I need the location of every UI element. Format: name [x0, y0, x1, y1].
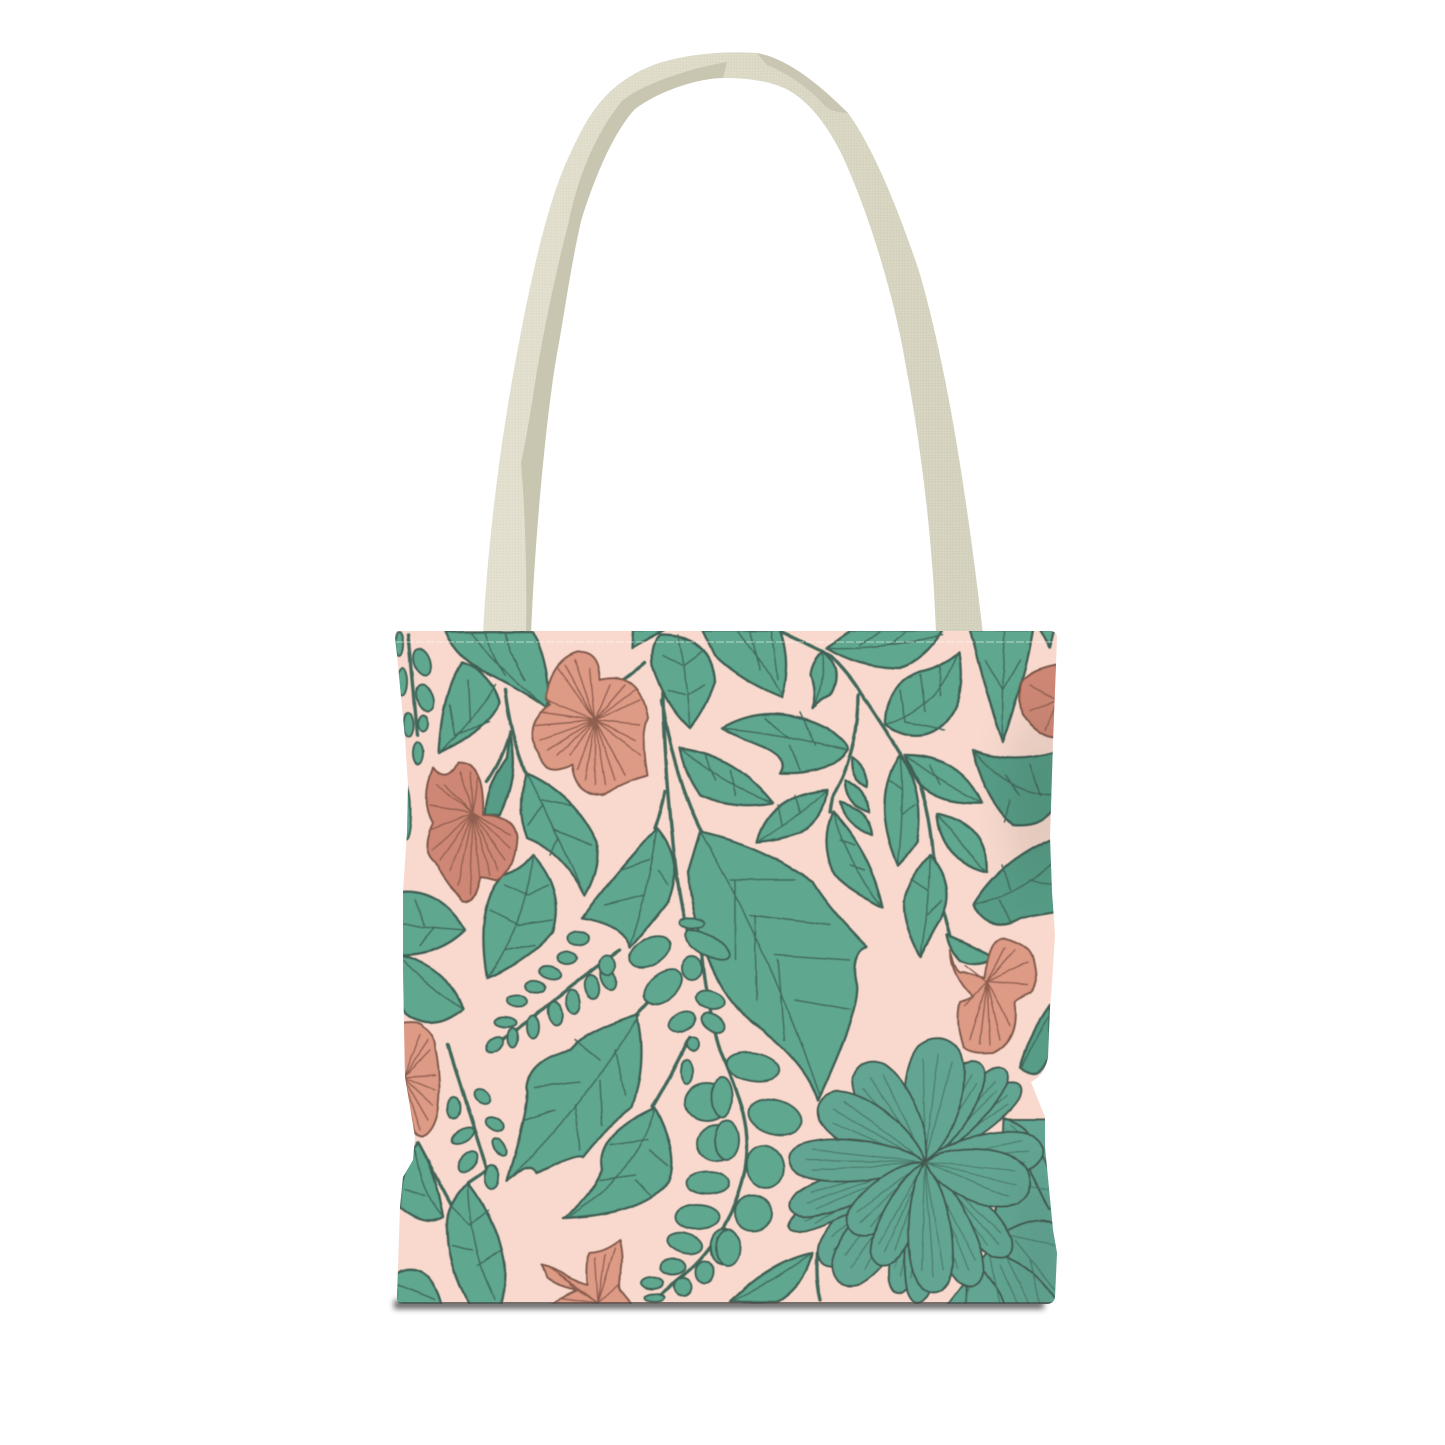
leaf: bottom left upper: [400, 1143, 443, 1221]
leaf: beside stem: [485, 735, 513, 815]
leaf: branch bottom: [904, 855, 947, 957]
leaf: below flower: [483, 855, 556, 978]
leaf: calyx over flower: [947, 935, 995, 964]
bottom edge line: [397, 1302, 1057, 1304]
leaf: under top left: [439, 663, 499, 753]
leaf: branch right lower: [937, 813, 987, 872]
leaf: top centre: [652, 635, 715, 728]
leaf: stem right: [680, 748, 773, 805]
leaf sprig: centre left: [483, 931, 619, 1056]
leaf: top centre right: [703, 630, 787, 697]
top-left leaves: [400, 632, 598, 1022]
leaf: upper right: [885, 653, 962, 736]
flower: left: [426, 762, 517, 902]
leaf sprig: left top: [395, 632, 437, 839]
right leaves: [884, 630, 1056, 1073]
leaf: left edge lower: [400, 955, 463, 1022]
centre leaves: [582, 630, 942, 1100]
top seam stitching: [396, 641, 1054, 643]
leaf: lower centre small: [563, 1108, 672, 1218]
leaf: corner fragment: [1040, 630, 1054, 648]
leaf: top left large: [445, 632, 548, 708]
leaf sprig: central hanging: [624, 918, 805, 1302]
leaf sprig: lower left: [448, 1086, 509, 1189]
flower: left lower edge: [400, 1022, 439, 1137]
flower: lower right: [950, 938, 1036, 1053]
strap shape: [483, 52, 983, 634]
leaf left of big leaf: [582, 828, 674, 948]
bag body with floral print: [390, 628, 1070, 1330]
bag shadow: [394, 1300, 1044, 1309]
fabric fold shading: [1010, 710, 1070, 1330]
flower: right edge: [1020, 665, 1057, 737]
stems: [408, 633, 950, 1300]
leaf: left edge upper: [400, 892, 465, 955]
leaf: bottom centre: [730, 1253, 812, 1302]
strap weave texture: [483, 52, 983, 634]
leaf: branch right: [905, 755, 982, 803]
flower: top centre: [532, 652, 648, 795]
leaf: horizontal: [722, 714, 847, 773]
leaf: branch left: [884, 755, 919, 865]
leaf: right upper: [973, 750, 1056, 825]
leaf: right lower: [973, 837, 1056, 924]
left strap fold shadow: [521, 62, 727, 634]
leaf: lower branch: [826, 812, 883, 907]
teal flower behind: [943, 1118, 1060, 1310]
big central leaf: [688, 832, 867, 1100]
leaf: lower centre large: [507, 1015, 641, 1180]
top strap fold shadow: [757, 53, 848, 113]
fabric background: [390, 628, 1060, 1310]
leaf: small left of branch: [757, 790, 827, 842]
leaf: bottom left long: [447, 1183, 505, 1306]
big teal flower: [783, 1035, 1046, 1304]
salmon flowers: [400, 652, 1057, 1306]
leaf: top edge: [827, 630, 942, 668]
leaf: bottom corner: [396, 1269, 442, 1306]
leaf: top edge fragment: [632, 630, 665, 648]
lower leaves: [396, 1015, 812, 1306]
small branch leaflets: [852, 757, 867, 788]
flower: bottom: [542, 1240, 632, 1306]
leaf: pointed upper: [810, 652, 836, 708]
bag handle: [483, 52, 983, 634]
leaf: right small: [1020, 1005, 1050, 1073]
leaf: top right hanging: [970, 630, 1033, 742]
leaf: descending right of flower: [521, 773, 598, 895]
